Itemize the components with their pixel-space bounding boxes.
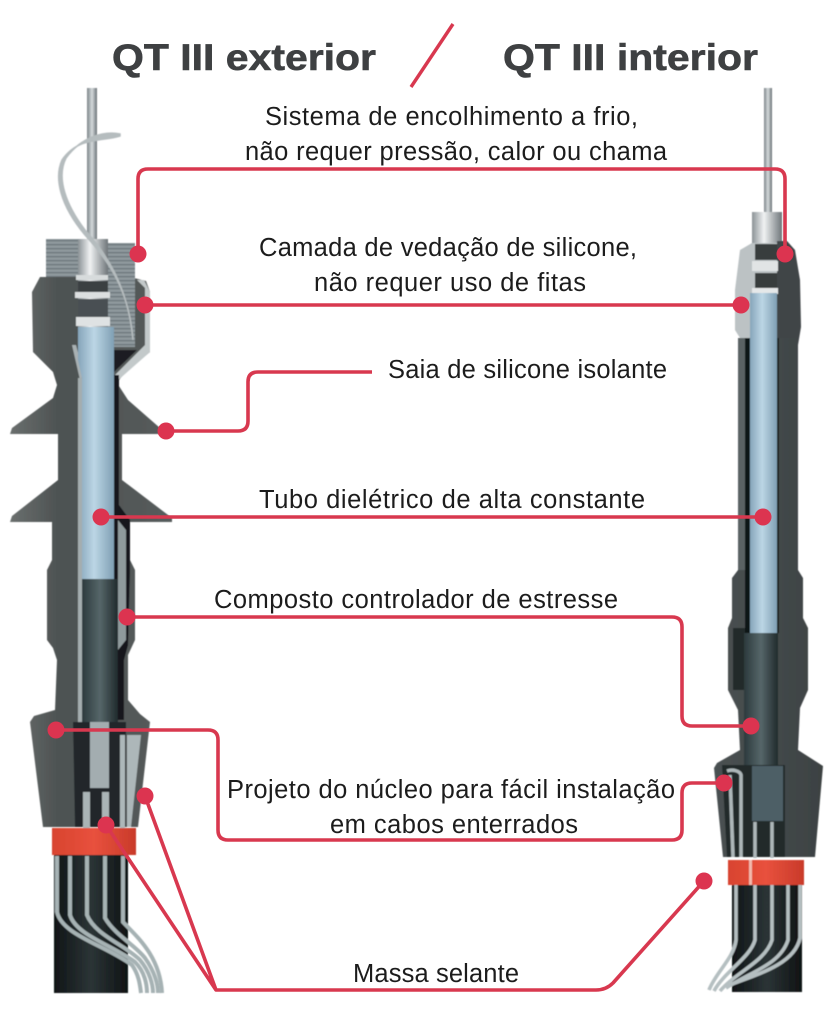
connector rings [755,244,777,288]
product: interior termination [709,88,823,992]
threaded cavity [107,243,135,347]
cable wires [709,885,800,991]
label: silicone sealing layer: Camada de vedação de silicone, [259,234,637,262]
dark stress control tube [744,633,778,765]
sheath highlight [738,338,745,570]
callout: silicone skirt [158,372,372,440]
callout: cold shrink [130,169,794,262]
label: core design [227,776,675,839]
lower inner core [73,722,126,827]
light inner liner [78,378,82,722]
label: cold shrink system: não requer pressão, calor ou chama [245,138,668,166]
blue dielectric tube [750,293,777,633]
label: silicone sealing layer [259,234,637,297]
stress inner left shading [733,628,745,690]
outer silicone body [10,277,172,827]
title: QT III exterior: QT III exterior [112,37,376,78]
label: core design: Projeto do núcleo para fácil instalação [227,776,675,804]
silver chamfer [72,345,84,380]
label: insulating skirt: Saia de silicone isolante [388,356,667,384]
title divider slash [411,24,453,87]
cable jacket [732,885,802,992]
conductor rod [764,88,772,213]
thin ribbon [59,133,133,340]
lower connector sleeve [752,766,783,821]
threaded collar left [46,239,78,277]
conductor rod [87,88,97,240]
label: cold shrink system: Sistema de encolhimento a frio, [265,103,638,131]
label: silicone sealing layer: não requer uso de fitas [314,269,586,297]
tube edge [777,338,779,633]
metal connector [752,212,782,244]
cable wires [57,856,162,993]
callout: sealing mass [98,788,712,990]
dark outer sheath top [777,241,801,345]
stress black stripe [113,375,130,720]
black void [113,350,137,372]
callout: silicone seal layer [136,296,750,314]
label: dielectric tube: Tubo dielétrico de alta constante [259,486,645,514]
callout: core design [48,722,732,840]
label: cold shrink system [245,103,668,166]
callout: dielectric tube [92,508,772,526]
cable jacket [54,855,128,993]
callout lines and dots [48,169,794,990]
silver seal layer [735,243,777,338]
metal connector [78,239,108,327]
label: sealing mass: Massa selante [353,960,519,988]
label: core design: em cabos enterrados [330,811,578,839]
title: QT III interior: QT III interior [503,37,758,78]
callout: stress control [118,608,760,734]
product: exterior termination [10,88,172,993]
outer silicone body [714,338,823,857]
inner wires [727,770,772,858]
inner black space [745,338,750,638]
silver wall [113,280,150,382]
red band [728,860,804,885]
red band [52,828,136,855]
blue dielectric tube [78,327,114,579]
label: stress control compound: Composto controlador de estresse [214,586,618,614]
dark stress control tube [82,579,118,724]
